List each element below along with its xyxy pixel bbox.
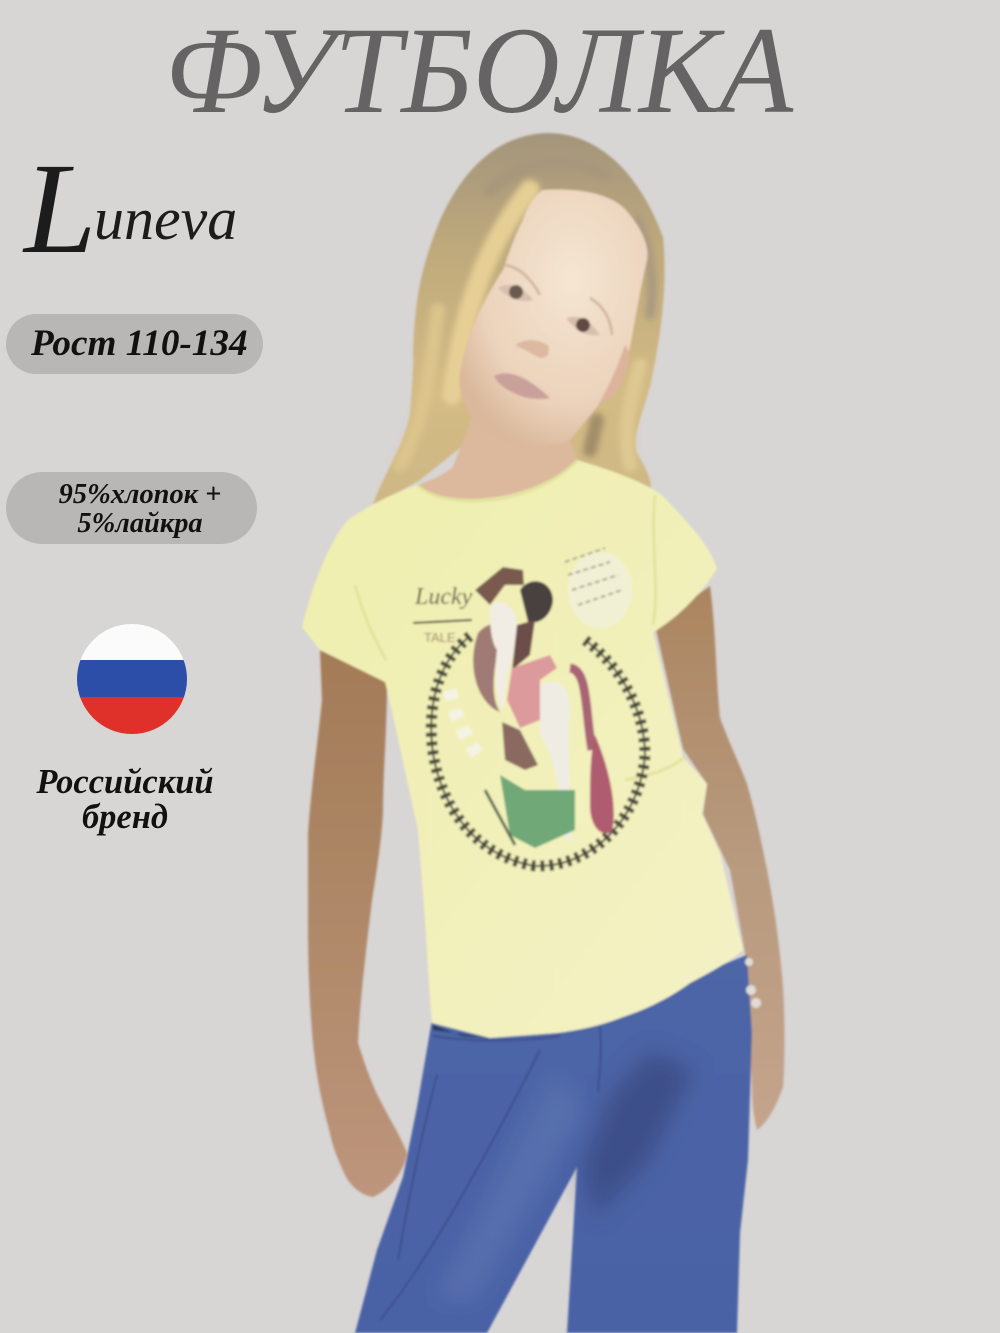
badge: height range: Рост 110-134 bbox=[31, 323, 248, 364]
neck bbox=[418, 415, 577, 506]
mane bbox=[473, 625, 500, 712]
arm: left, with hand bbox=[308, 650, 407, 1197]
arm: right, with hand bbox=[655, 586, 784, 1130]
illustration: girl in yellow t-shirt and jeans bbox=[77, 132, 786, 1333]
t-shirt print: unicorn in wreath: TALE bbox=[424, 630, 456, 645]
plants bbox=[500, 775, 575, 848]
icon: Russian flag bbox=[77, 624, 187, 734]
face bbox=[460, 190, 648, 446]
t-shirt bbox=[302, 460, 743, 1038]
dress bbox=[507, 655, 557, 728]
hair bbox=[372, 133, 665, 507]
lettering: Lucky bbox=[414, 584, 473, 610]
caption: Russian brand: Российский bbox=[36, 763, 214, 801]
ear bbox=[598, 345, 629, 405]
glitter bbox=[450, 690, 478, 755]
caption: Russian brand: бренд bbox=[82, 798, 168, 836]
nose bbox=[515, 340, 549, 358]
eyes bbox=[498, 265, 612, 335]
mouth bbox=[494, 373, 550, 399]
horse body and hind leg bbox=[540, 682, 571, 840]
bracelet bbox=[745, 958, 761, 1008]
badge: composition: 95%хлопок + bbox=[59, 479, 221, 510]
rider hair and ribbon bbox=[520, 581, 553, 623]
wreath bbox=[431, 636, 645, 866]
jeans bbox=[355, 955, 752, 1333]
jeans shadows and seams bbox=[380, 1025, 695, 1320]
t-shirt folds bbox=[355, 461, 685, 780]
logo bbox=[22, 137, 237, 281]
badge: composition: 5%лайкра bbox=[77, 508, 203, 539]
badge: composition bbox=[6, 472, 257, 544]
caption: Russian brand bbox=[36, 763, 214, 836]
badge: height range bbox=[6, 314, 263, 374]
unicorn head and neck bbox=[490, 602, 517, 712]
t-shirt print: unicorn in wreath bbox=[413, 548, 645, 866]
tail bbox=[570, 668, 592, 750]
title: ФУТБОЛКА bbox=[165, 2, 793, 139]
logo: L bbox=[24, 137, 96, 281]
logo: uneva bbox=[94, 186, 237, 252]
front legs bbox=[502, 722, 538, 770]
